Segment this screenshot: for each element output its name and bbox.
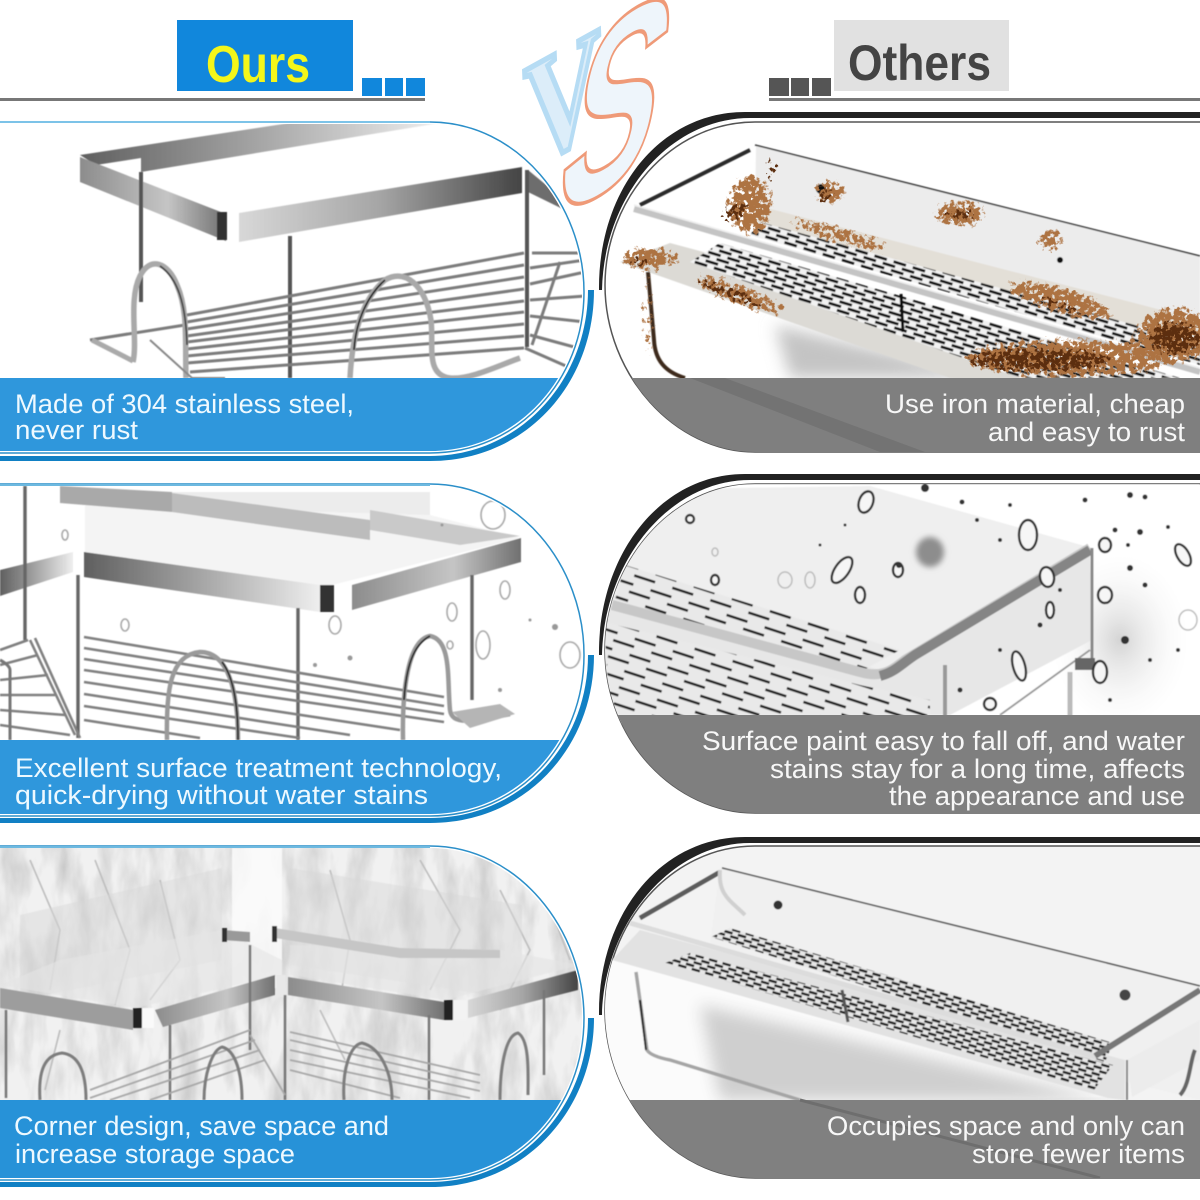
heading: ours [0,20,425,101]
panel: ours corner design [0,846,594,1187]
caption text: store fewer items [972,1139,1185,1169]
product: narrow shelf [600,868,1200,1178]
caption text [15,389,354,445]
panel: ours rust-free [0,121,594,461]
caption text: increase storage space [15,1139,295,1169]
caption text: never rust [15,415,138,445]
product: stained shelf [600,484,1200,813]
panel: others water stains [599,474,1200,813]
panel: others rust [599,112,1200,452]
caption text [827,1111,1185,1169]
heading: others [769,20,1200,101]
caption text: quick-drying without water stains [15,780,428,810]
caption text [885,389,1185,447]
caption band [600,378,1200,452]
caption text: stains stay for a long time, affects [770,754,1185,784]
heading: others: Others [848,35,991,91]
heading: ours: Ours [206,36,310,94]
caption band [600,715,1200,813]
panel: ours water-resistant [0,484,594,823]
caption text: Surface paint easy to fall off, and water [702,726,1185,756]
vs emblem [522,0,697,278]
caption text [702,726,1185,811]
product: shelf with water drops [0,486,580,740]
outer blue frame [0,655,594,823]
caption text [14,1111,389,1169]
caption text: Occupies space and only can [827,1111,1185,1141]
panel: others limited space [599,837,1200,1178]
caption band [600,1100,1200,1178]
outer blue frame [0,290,594,461]
caption band [0,378,582,451]
caption text: Corner design, save space and [14,1111,389,1141]
product: stainless steel shelf [80,123,585,378]
outer blue frame [0,1018,594,1187]
product: rusty iron shelf [600,145,1200,452]
caption text: the appearance and use [889,781,1185,811]
caption text: and easy to rust [988,417,1185,447]
caption band [0,1100,582,1178]
caption text: Use iron material, cheap [885,389,1185,419]
caption band [0,740,582,814]
caption text [15,753,502,810]
rust patches: light [616,173,1200,378]
rust patches: dark [620,152,1200,374]
caption text: Excellent surface treatment technology, [15,753,502,783]
caption text: Made of 304 stainless steel, [15,389,354,419]
product: corner shelf on marble [0,848,582,1132]
